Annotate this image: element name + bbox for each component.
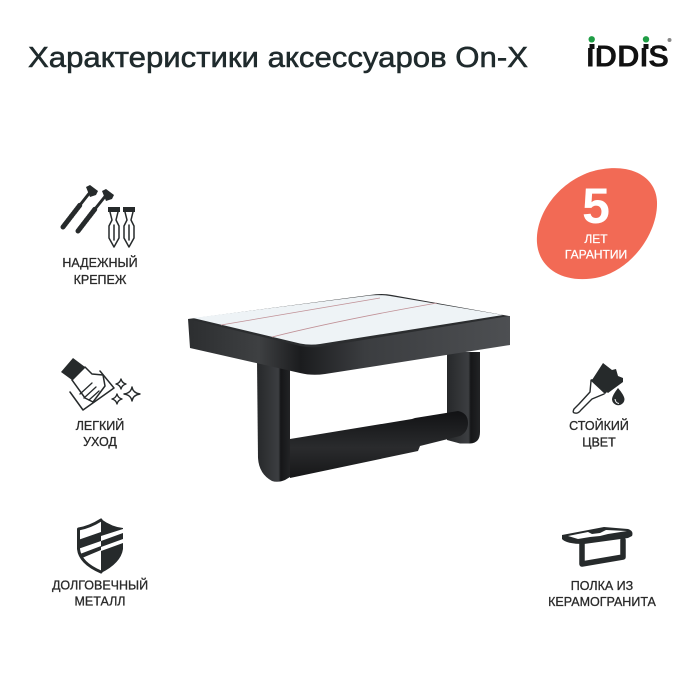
feature: easy care: УХОД [83, 435, 117, 449]
ceramic top [193, 295, 503, 345]
shelf top rim [188, 294, 509, 347]
label: ДОЛГОВЕЧНЫЙ [52, 578, 148, 592]
label: ЛЕТ [584, 232, 608, 246]
label: СТОЙКИЙ [569, 418, 629, 433]
feature: durable metal [52, 519, 148, 608]
icon: shield [78, 519, 123, 573]
marble veins [221, 298, 437, 337]
icon: hand with cloth and sparkles [61, 358, 140, 410]
right post [447, 352, 480, 444]
shelf front edge [188, 316, 510, 375]
left post [257, 360, 290, 482]
number: 5 [582, 178, 610, 234]
feature: porcelain shelf: КЕРАМОГРАНИТА [548, 595, 657, 609]
feature: lasting colour: ЦВЕТ [582, 436, 616, 450]
feature: fasteners: КРЕПЕЖ [74, 273, 127, 287]
feature: fasteners [62, 185, 138, 287]
title: Характеристики аксессуаров On-X [28, 42, 528, 74]
roller [290, 411, 468, 478]
feature: easy care [61, 358, 140, 449]
badge blob [537, 168, 657, 279]
feature: lasting colour [569, 363, 629, 450]
feature: durable metal: МЕТАЛЛ [74, 594, 126, 608]
product photo: toilet paper holder with ceramic shelf [188, 294, 510, 482]
feature: porcelain shelf [548, 527, 657, 609]
icon: paint brush and drop [573, 363, 624, 413]
logo: IDDIS: IDDIS [586, 38, 669, 74]
icon: shelf [562, 527, 632, 564]
warranty badge: ГАРАНТИИ [565, 248, 627, 262]
warranty badge [537, 168, 657, 279]
label: ПОЛКА ИЗ [571, 579, 633, 593]
label: ЛЕГКИЙ [76, 418, 124, 433]
label: НАДЕЖНЫЙ [62, 255, 138, 270]
icon: screws and wall plugs [63, 185, 135, 247]
